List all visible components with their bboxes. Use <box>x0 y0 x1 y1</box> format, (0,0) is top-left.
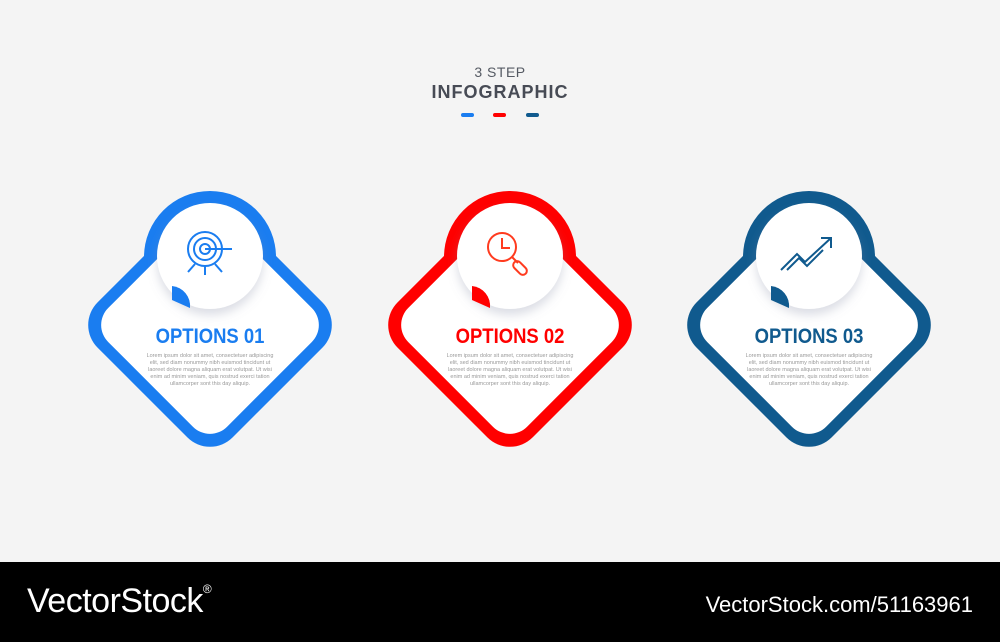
icon: magnifier clock <box>488 233 528 276</box>
subtitle: 3 STEP <box>474 64 526 80</box>
body text: enim ad minim veniam, quis nostrud exerci tation <box>150 374 270 380</box>
body text: Lorem ipsum dolor sit amet, consectetuer adipiscing <box>447 353 573 359</box>
body text: enim ad minim veniam, quis nostrud exerci tation <box>749 374 869 380</box>
body text: elit, sed diam nonummy nibh euismod tincidunt ut <box>749 360 870 366</box>
body text <box>147 353 273 387</box>
icon: trend arrow <box>781 238 831 270</box>
body text: laoreet dolore magna aliquam erat volutpat. Ut wisi <box>148 367 272 373</box>
body text: enim ad minim veniam, quis nostrud exerci tation <box>450 374 570 380</box>
card 3 <box>674 190 944 460</box>
body text: laoreet dolore magna aliquam erat volutpat. Ut wisi <box>448 367 572 373</box>
card 1 <box>75 190 345 460</box>
body text: ullamcorper sont this day aliquip. <box>170 381 251 387</box>
heading: OPTIONS 02 <box>456 325 564 348</box>
body text: Lorem ipsum dolor sit amet, consectetuer adipiscing <box>746 353 872 359</box>
heading: OPTIONS 01 <box>156 325 264 348</box>
body text: ullamcorper sont this day aliquip. <box>769 381 850 387</box>
body text: Lorem ipsum dolor sit amet, consectetuer adipiscing <box>147 353 273 359</box>
body text: laoreet dolore magna aliquam erat volutpat. Ut wisi <box>747 367 871 373</box>
body text: ullamcorper sont this day aliquip. <box>470 381 551 387</box>
header <box>432 64 568 102</box>
footer bar <box>0 562 1000 642</box>
title: INFOGRAPHIC <box>432 82 568 102</box>
url: VectorStock.com/51163961 <box>706 592 973 617</box>
card 2 <box>375 190 645 460</box>
body text: elit, sed diam nonummy nibh euismod tincidunt ut <box>150 360 271 366</box>
body text: elit, sed diam nonummy nibh euismod tincidunt ut <box>450 360 571 366</box>
icon: target <box>188 232 232 275</box>
body text <box>447 353 573 387</box>
logo: VectorStock® <box>27 582 211 620</box>
body text <box>746 353 872 387</box>
heading: OPTIONS 03 <box>755 325 863 348</box>
